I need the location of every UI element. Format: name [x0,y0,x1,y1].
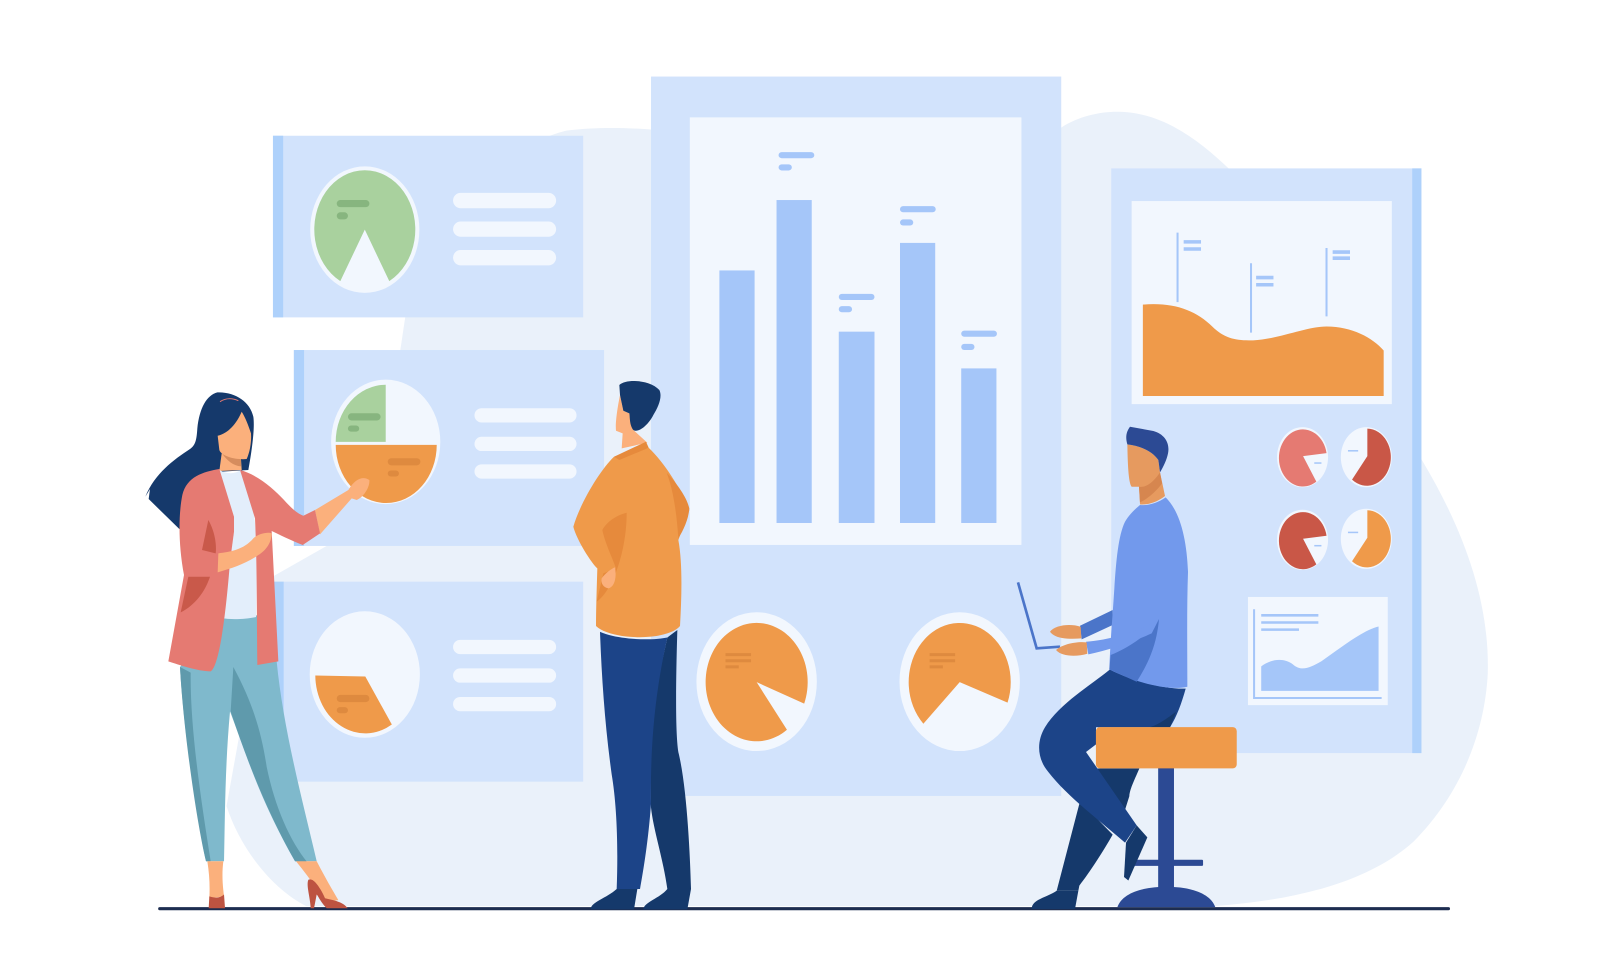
front forearm [218,533,272,572]
front sleeve [1086,619,1159,654]
rear sleeve [1080,610,1113,639]
person: woman presenting, upper body [145,392,369,671]
face and neck [616,395,647,448]
hair band [220,399,238,402]
bar chart [690,117,1021,545]
neck shadow [222,453,241,466]
raised forearm [315,478,369,534]
collar [614,442,649,460]
leg left [207,861,224,898]
sweater shadow [1109,619,1159,682]
raised foot [1124,825,1147,880]
hand [601,567,616,588]
stool base [1117,887,1215,907]
person: woman presenting, lower body [180,615,348,908]
ground line [158,907,1450,910]
neck shadow [1139,472,1162,502]
trousers [180,615,317,861]
back leg [1057,769,1139,891]
jacket shadow lower [181,577,210,612]
top [219,470,256,619]
pie chart: small red bottom [1277,510,1328,570]
back leg [651,630,691,889]
area chart: small [1248,597,1388,705]
person: man standing, lower body [591,630,691,909]
sweater [573,448,689,637]
trousers shadow [1150,712,1176,727]
shoe left [209,895,225,908]
jacket right [240,470,320,665]
stool seat [1096,727,1237,768]
sweater [1109,497,1188,688]
trousers shadow inner [231,667,307,862]
face [218,412,251,459]
jacket left [168,469,234,671]
stool post [1158,765,1174,893]
panel: top left card [273,136,583,317]
trousers shadow left [180,667,211,861]
front leg [600,632,667,889]
sweater shadow right [667,473,689,538]
pie chart: small pink [1277,427,1328,487]
person: seated man, lower body [1032,669,1186,909]
area chart: large [1132,201,1392,404]
standing shoe [1032,891,1078,909]
shoe right [308,879,348,908]
panel: middle left card [294,350,604,546]
panel: central board [651,77,1061,796]
trousers [1039,669,1186,843]
pie chart: small red top [1341,427,1392,487]
shoes [591,889,691,909]
panel: bottom left card [273,582,583,782]
hair [1126,427,1168,472]
stool foot bar [1133,860,1203,866]
pie chart: small orange [1341,509,1392,569]
hair [145,392,254,529]
panel: right board [1111,168,1421,753]
jacket shadow upper [202,520,216,553]
pie chart: left [696,612,817,751]
hair [619,381,661,431]
pie chart: right [899,612,1020,751]
person: man standing, upper body [573,381,689,637]
rear hand [1050,625,1081,639]
front hand [1056,642,1087,656]
leg right [296,861,338,902]
person: seated man, upper body [1018,427,1188,688]
background blob [227,112,1488,906]
face and neck [1127,444,1165,504]
laptop [1018,582,1060,648]
sweater shadow inner [597,513,627,602]
neck [219,453,242,471]
